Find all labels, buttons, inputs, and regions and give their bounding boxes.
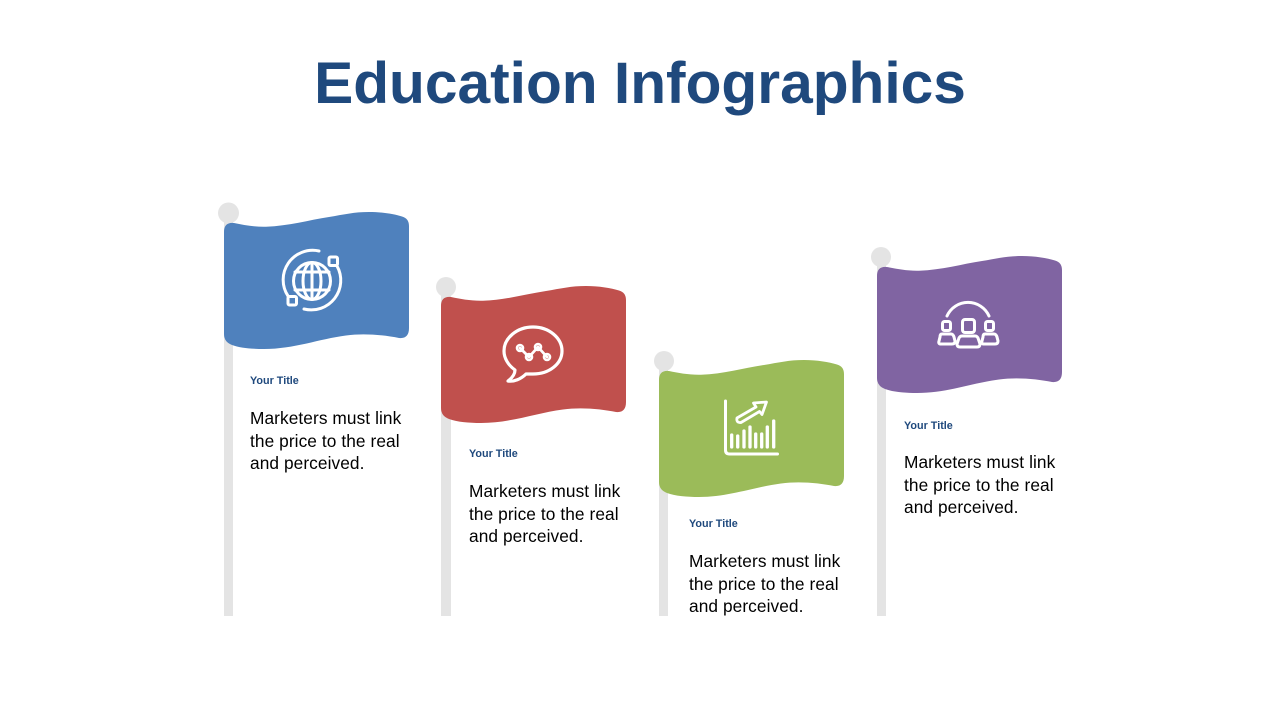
icon: globe with orbit: [283, 250, 341, 310]
body 1: and perceived.: [250, 453, 364, 473]
body 2: Marketers must link: [469, 481, 620, 501]
icon: speech bubble with line chart: [504, 327, 562, 381]
body 4: and perceived.: [904, 497, 1018, 517]
body 1: the price to the real: [250, 431, 400, 451]
body 2: [469, 481, 620, 546]
body 4: the price to the real: [904, 475, 1054, 495]
heading 2: Your Title: [469, 448, 518, 460]
title: Education Infographics: [314, 51, 966, 116]
flag 4: people (purple): [871, 247, 1062, 616]
flag 1: globe (blue): [218, 202, 409, 616]
heading 4: Your Title: [904, 420, 953, 432]
body 3: Marketers must link: [689, 551, 840, 571]
icon: bar chart with arrow: [726, 401, 778, 454]
body 1: [250, 408, 402, 473]
text block 3: [689, 518, 840, 616]
body 3: the price to the real: [689, 574, 839, 594]
body 3: [689, 551, 840, 616]
body 4: Marketers must link: [904, 452, 1055, 472]
body 2: the price to the real: [469, 504, 619, 524]
body 2: and perceived.: [469, 526, 584, 546]
text block 2: [469, 448, 620, 546]
body 1: Marketers must link: [250, 408, 401, 428]
icon: group of people: [939, 302, 998, 347]
text block 4: [904, 420, 1056, 517]
body 4: [904, 452, 1056, 517]
heading 3: Your Title: [689, 518, 738, 530]
flag 2: speech bubble (red): [436, 277, 626, 616]
flag 3: chart (green): [654, 351, 844, 616]
body 3: and perceived.: [689, 596, 804, 616]
text block 1: [250, 375, 402, 473]
heading 1: Your Title: [250, 375, 299, 387]
